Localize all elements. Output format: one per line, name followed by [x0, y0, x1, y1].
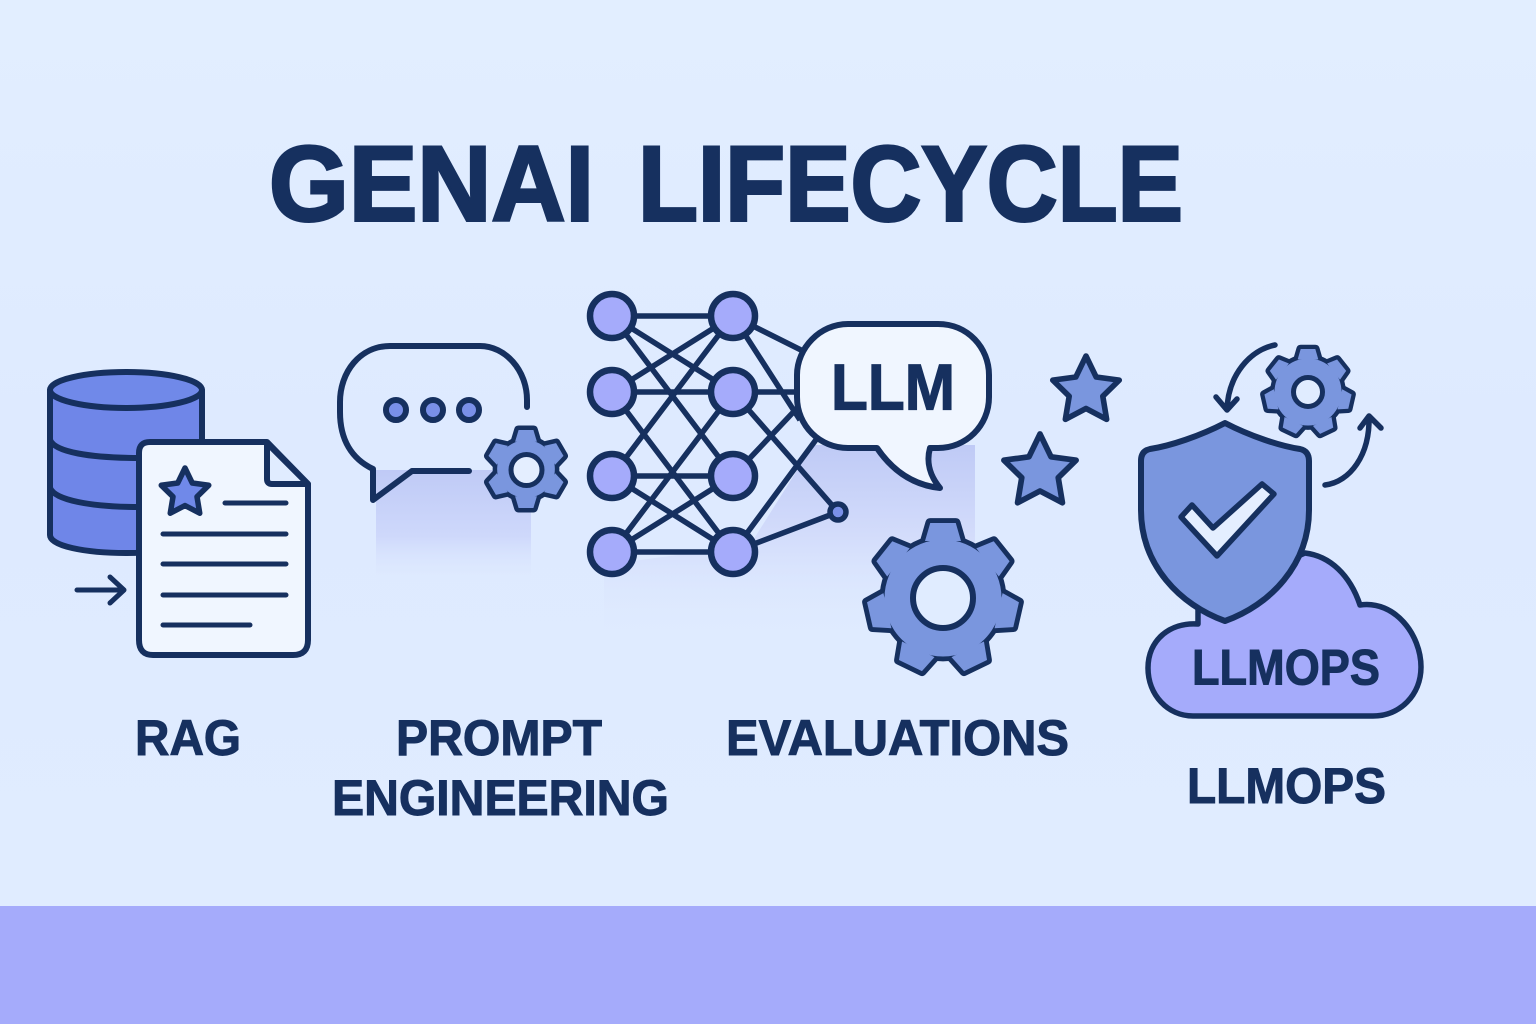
- label: prompt engineering: ENGINEERING: [332, 770, 669, 826]
- icon: LLMOPS gear: [1264, 349, 1352, 435]
- label: prompt engineering: PROMPT: [396, 710, 602, 766]
- arrow into document: [77, 577, 124, 603]
- title: [269, 124, 1183, 244]
- label: RAG: RAG: [135, 710, 241, 766]
- icon: upper star: [1053, 356, 1119, 419]
- typing dots: [386, 400, 479, 420]
- neural network: [590, 294, 846, 574]
- bottom band: [0, 906, 1536, 1024]
- shadow under prompt bubble: [376, 470, 531, 590]
- shadow behind LLM bubble: [604, 445, 975, 640]
- network connections: [612, 316, 838, 552]
- title: LIFECYCLE: [638, 124, 1183, 244]
- cloud label: LLMOPS: [1192, 640, 1380, 696]
- icon: shield with check: [1141, 423, 1309, 621]
- arrow: cycle right: [1325, 416, 1381, 485]
- icon: cloud: [1148, 553, 1421, 716]
- icon: prompt speech bubble: [340, 346, 527, 500]
- icon: LLM speech bubble: [797, 324, 989, 488]
- icon: small gear on prompt bubble: [487, 430, 565, 508]
- icon: star on document: [161, 468, 209, 513]
- arrow: cycle left: [1216, 345, 1275, 410]
- label: prompt engineering: [332, 710, 669, 826]
- output node: [830, 504, 846, 520]
- check mark: [1181, 484, 1274, 556]
- icon: lower star: [1004, 434, 1076, 503]
- network nodes: [590, 294, 755, 574]
- title: GENAI: [269, 124, 594, 244]
- icon: large evaluation gear: [866, 523, 1020, 673]
- LLM text: LLM: [831, 350, 955, 424]
- label: LLMOPS: LLMOPS: [1187, 758, 1386, 814]
- icon: database and document (RAG): [50, 372, 308, 655]
- label: evaluations: EVALUATIONS: [726, 710, 1069, 766]
- document: [139, 442, 308, 655]
- database cylinder: [50, 372, 202, 553]
